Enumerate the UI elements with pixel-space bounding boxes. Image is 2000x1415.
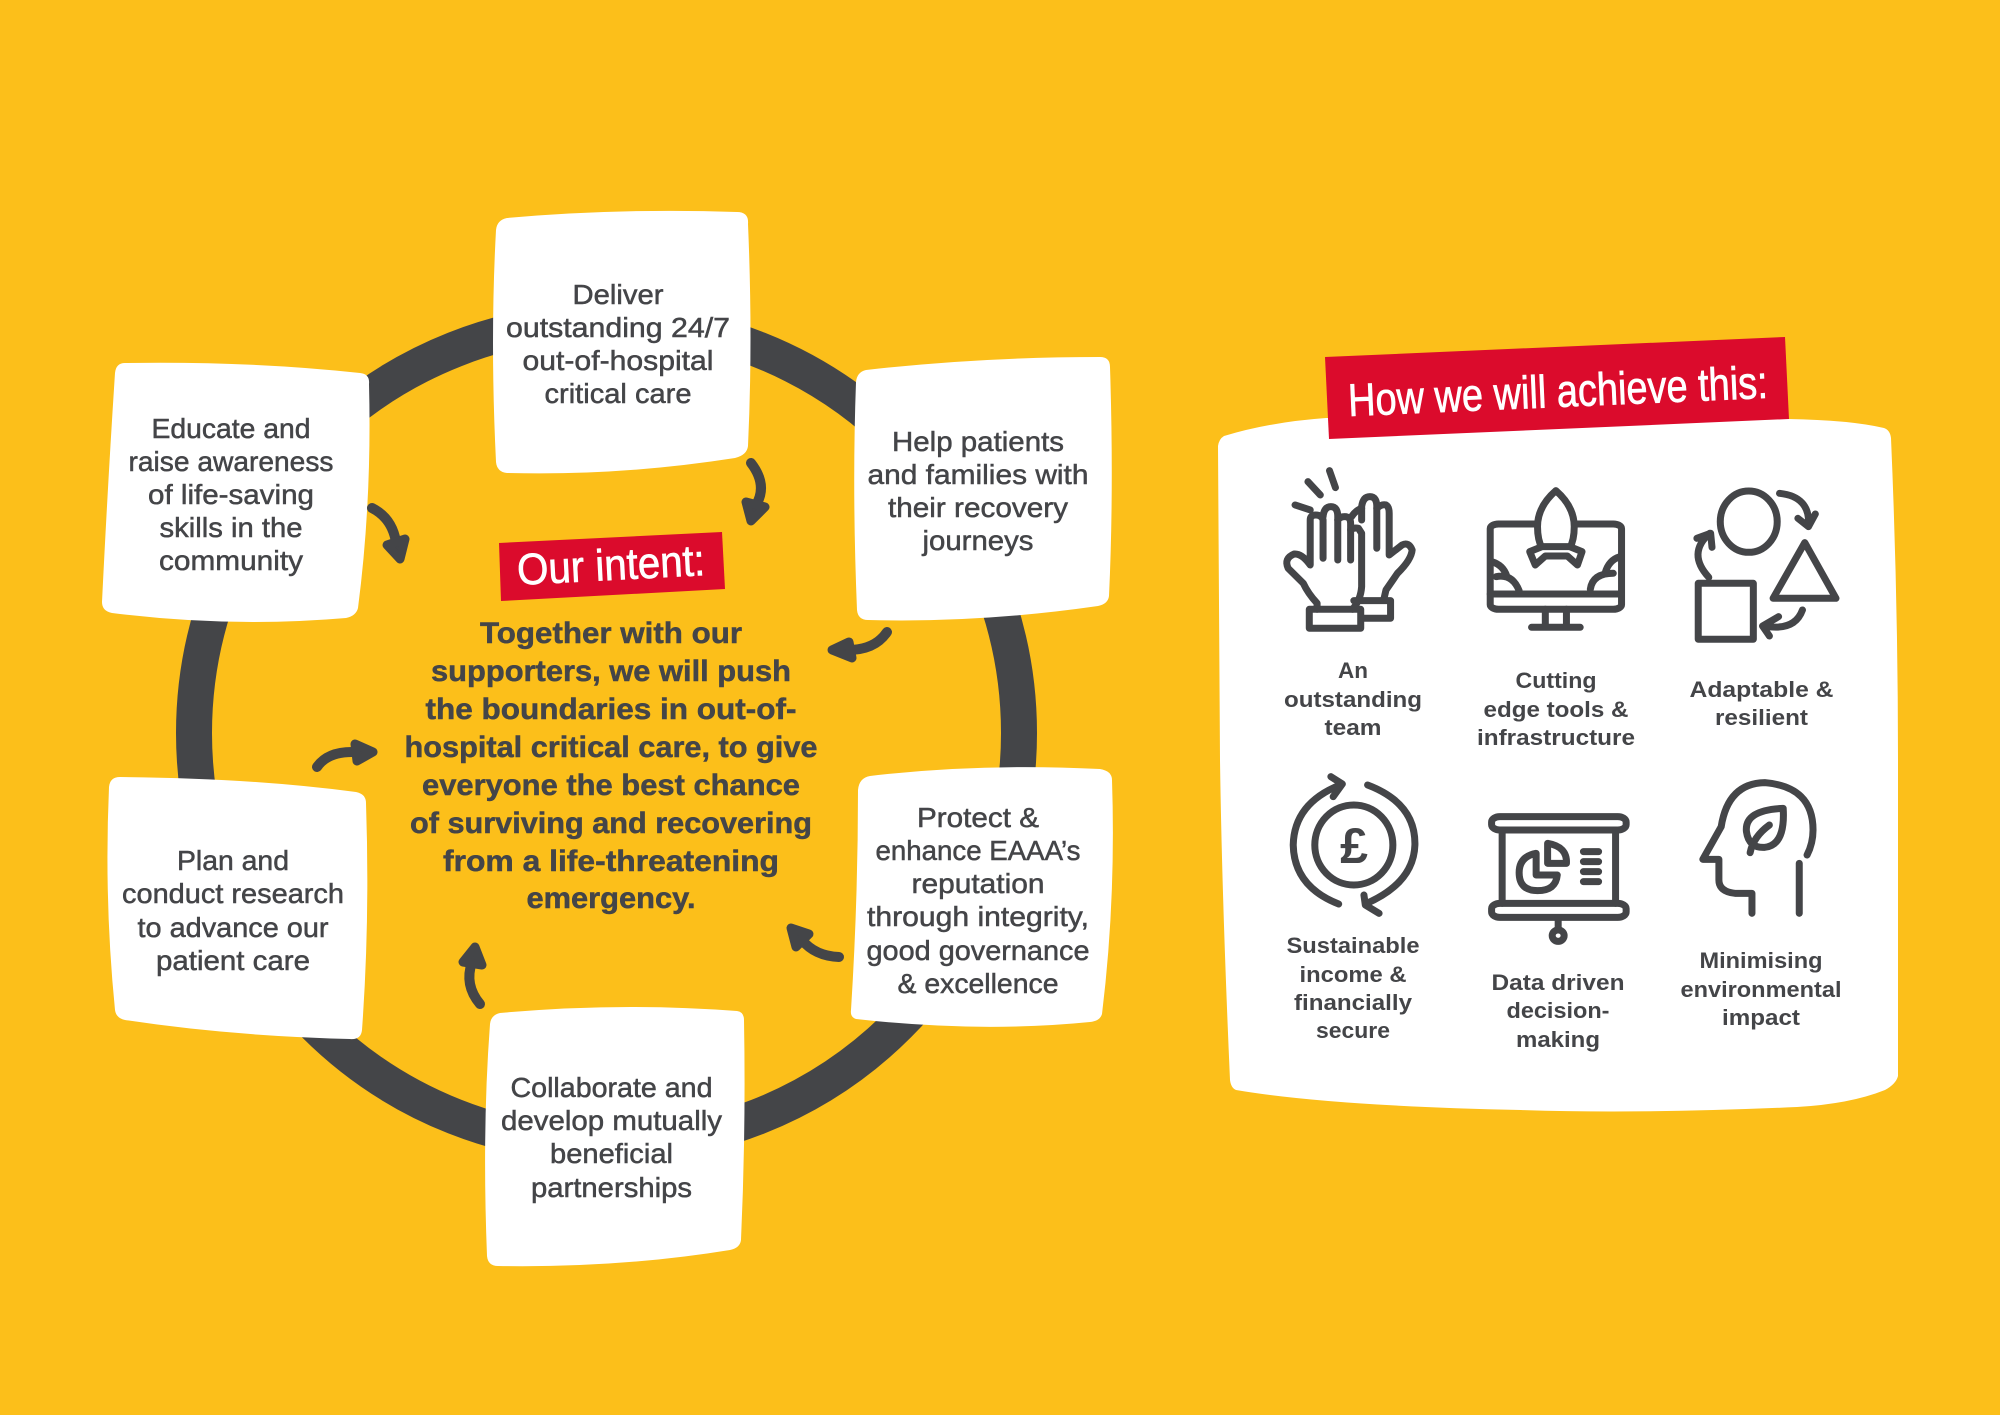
text block: intent statement: emergency. [526,882,696,915]
panel: help patients: and families with [868,459,1088,490]
label: sustainable income [1286,933,1420,1043]
panel: help patients: Help patients [892,426,1064,457]
panel: help patients [854,357,1112,620]
panel: collaborate: develop mutually [501,1105,722,1136]
panel: collaborate: beneficial [550,1138,673,1169]
label: adaptable and resilient: Adaptable & [1690,677,1834,702]
text block: intent statement: everyone the best chance [422,769,800,802]
panel: educate: raise awareness [128,446,334,477]
label: an outstanding team [1284,658,1422,740]
panel: help patients: journeys [921,525,1034,556]
panel: educate: community [159,545,303,576]
text block: intent statement: of surviving and recovering [410,807,812,840]
label: cutting edge tools: edge tools & [1484,697,1629,722]
label: minimising environmental impact [1680,948,1842,1030]
label: sustainable income: Sustainable [1286,933,1420,958]
panel: deliver care [493,211,750,473]
arrow: from collaborate [463,947,482,1004]
panel: collaborate [485,1007,745,1266]
label: sustainable income: financially [1294,990,1413,1015]
label: cutting edge tools: infrastructure [1477,725,1635,750]
icon: high five hands [1287,471,1412,628]
text block: intent statement: supporters, we will push [431,655,791,688]
arrow: from deliver care [746,463,765,521]
panel: protect reputation [851,767,1113,1027]
icon: adaptable shapes [1697,491,1836,639]
panel: educate: of life-saving [148,479,314,510]
label: minimising environmental impact: environmental [1680,977,1842,1002]
panel: how we will achieve this [1218,418,1898,1111]
panel: protect reputation: Protect & [917,802,1039,833]
panel: help patients: their recovery [888,492,1068,523]
label: an outstanding team: An [1338,658,1368,683]
panel: plan research [107,777,367,1039]
label: an outstanding team: outstanding [1284,687,1422,712]
label: minimising environmental impact: Minimising [1700,948,1822,973]
panel: protect reputation: reputation [912,868,1044,899]
panel: deliver care: Deliver [572,279,664,310]
panel: protect reputation: through integrity, [867,901,1089,932]
panel: plan research: Plan and [177,845,289,876]
panel: collaborate: Collaborate and [510,1072,712,1103]
arrow: from educate [372,508,405,559]
text block: intent statement [404,617,818,915]
label: data driven decision-making: making [1516,1027,1600,1052]
label: an outstanding team: team [1324,715,1382,740]
arrow: from plan research [317,744,373,767]
label: sustainable income: secure [1316,1018,1390,1043]
panel: protect reputation: & excellence [898,968,1058,999]
panel: protect reputation: enhance EAAA’s [876,835,1080,866]
panel: deliver care: critical care [544,378,692,409]
panel: deliver care: outstanding 24/7 [506,312,730,343]
heading: how we will achieve this [1325,337,1789,439]
panel: deliver care: out-of-hospital [522,345,714,376]
text block: intent statement: the boundaries in out-of- [426,693,796,726]
text block: intent statement: hospital critical care, to give [404,731,818,764]
icon: head with leaf [1703,783,1813,913]
icon: presentation board [1492,817,1626,941]
label: data driven decision-making: Data driven [1492,970,1624,995]
label: sustainable income: income & [1300,962,1407,987]
panel: protect reputation: good governance [866,935,1090,966]
panel: collaborate: partnerships [531,1172,692,1203]
text block: intent statement: Together with our [480,617,742,650]
label: cutting edge tools [1477,668,1635,750]
label: adaptable and resilient [1690,677,1834,730]
panel: educate: Educate and [152,413,310,444]
icon: pound cycle: £ [1340,818,1368,874]
label: cutting edge tools: Cutting [1516,668,1596,693]
label: data driven decision-making [1492,970,1624,1052]
text block: intent statement: from a life-threatening [443,845,779,878]
panel: plan research: patient care [156,945,310,976]
panel: plan research: conduct research [122,878,344,909]
panel: plan research: to advance our [138,912,328,943]
icon: rocket and monitor [1490,491,1622,627]
heading: how we will achieve this: How we will achieve this: [1347,356,1769,426]
arrow: from help patients [832,632,887,658]
circular ring [194,320,1019,1146]
label: minimising environmental impact: impact [1722,1005,1801,1030]
heading: our intent: Our intent: [516,536,706,595]
arrow: from protect reputation [791,928,839,957]
label: adaptable and resilient: resilient [1715,705,1809,730]
panel: educate: skills in the [160,512,302,543]
panel: educate [102,363,370,622]
icon: pound cycle [1293,777,1415,913]
label: data driven decision-making: decision- [1506,998,1610,1023]
